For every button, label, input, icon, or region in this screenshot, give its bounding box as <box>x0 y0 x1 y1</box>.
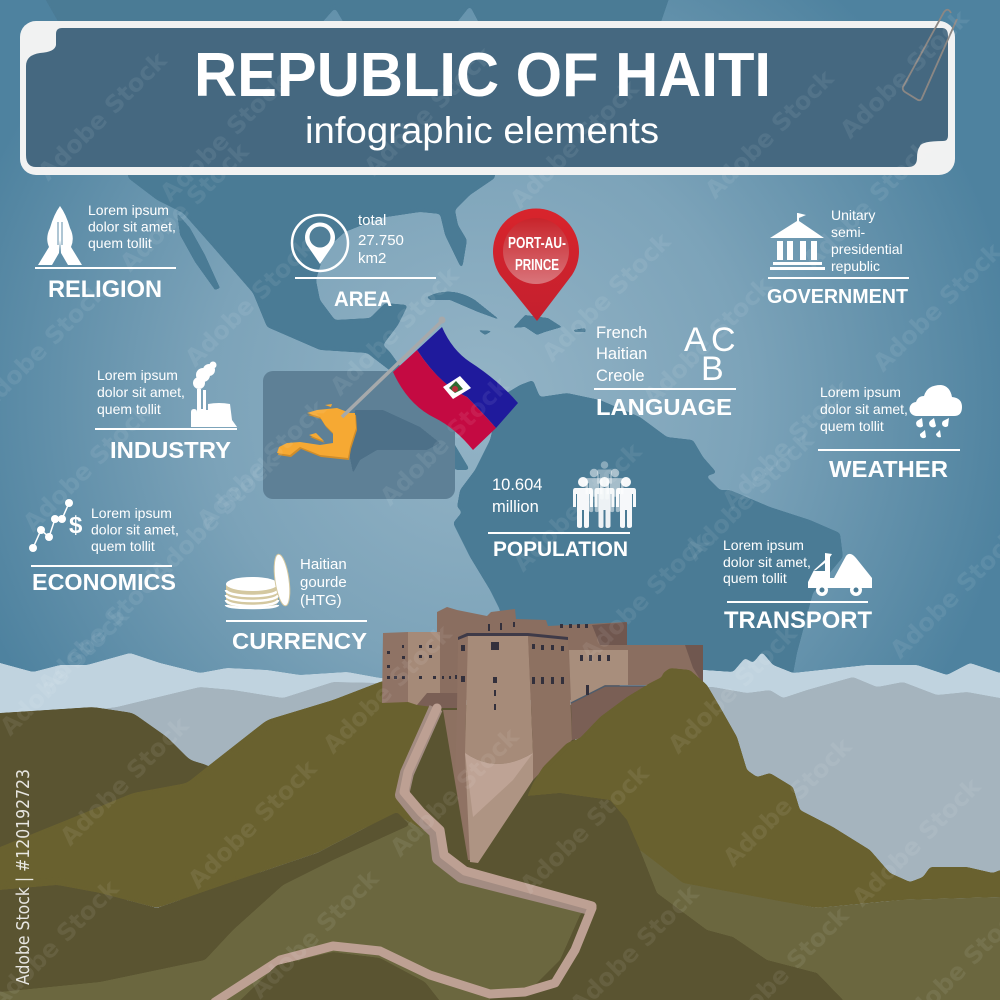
transport text: Lorem ipsum <box>723 537 804 553</box>
watermarks: Adobe Stock <box>145 447 285 587</box>
hill: dome under lower road <box>230 952 447 1000</box>
hill: right olive <box>527 668 1000 908</box>
industry text: Lorem ipsum <box>97 367 178 383</box>
section: weather: quem tollit <box>820 418 884 434</box>
icon: group of people <box>573 461 636 528</box>
icon: abc letters <box>684 321 736 388</box>
section: language: Creole <box>596 367 645 385</box>
section: religion: quem tollit <box>88 235 152 251</box>
banner frame <box>20 21 955 175</box>
watermarks: Adobe Stock <box>55 711 195 851</box>
watermarks: Adobe Stock <box>638 271 778 411</box>
fortress west wing side <box>382 632 408 703</box>
section: government: presidential <box>831 241 903 257</box>
watermarks: Adobe Stock <box>318 619 458 759</box>
watermarks: Adobe Stock <box>575 527 715 667</box>
section: religion <box>35 202 176 303</box>
currency heading: CURRENCY <box>232 628 367 654</box>
subtitle: infographic elements <box>305 110 659 151</box>
section: area <box>292 212 436 311</box>
weather heading: WEATHER <box>829 456 948 482</box>
language heading: LANGUAGE <box>596 394 732 420</box>
map: central america and mexico <box>128 170 495 470</box>
section: government: republic <box>831 258 880 274</box>
section: economics: quem tollit <box>91 538 155 554</box>
section: industry <box>95 362 237 463</box>
section: economics <box>29 499 179 595</box>
section: population: million <box>492 498 539 516</box>
fortress dark back wall <box>592 622 627 645</box>
icon: location pin in circle <box>292 215 348 271</box>
watermarks: Adobe Stock <box>798 134 938 274</box>
icon: factory with smoke <box>191 362 237 427</box>
hill: dark band <box>0 812 410 994</box>
watermarks: Adobe Stock <box>375 371 515 511</box>
section: currency <box>226 553 367 654</box>
fortress middle wing <box>569 650 628 703</box>
industry heading: INDUSTRY <box>110 437 231 463</box>
header banner <box>20 10 957 175</box>
icon: rain cloud <box>909 385 962 438</box>
section: economics: dolor sit amet, <box>91 522 179 538</box>
dominican republic <box>350 410 440 473</box>
icon: praying hands <box>38 206 82 265</box>
watermarks: Adobe Stock <box>155 67 295 207</box>
fortress central shade <box>455 635 470 860</box>
language text: French <box>596 324 647 342</box>
watermarks: Adobe Stock <box>33 46 173 186</box>
icon: paperclip <box>903 10 957 100</box>
hill: central dark <box>470 793 850 1000</box>
map: caribbean islands <box>427 292 586 335</box>
map: baja california <box>177 213 220 290</box>
watermarks: Adobe Stock <box>508 437 648 577</box>
economics text: Lorem ipsum <box>91 505 172 521</box>
watermarks: Adobe Stock <box>192 394 332 534</box>
mountains: pale ridge <box>0 652 1000 1000</box>
economics heading: ECONOMICS <box>32 569 176 595</box>
map: north america, top <box>40 0 672 25</box>
area text: total <box>358 212 386 229</box>
section: transport <box>723 537 872 634</box>
section: weather <box>818 384 962 482</box>
watermarks: Adobe Stock <box>33 559 173 699</box>
section: language <box>594 321 736 420</box>
section: government <box>767 207 909 308</box>
religion heading: RELIGION <box>48 276 162 303</box>
watermarks: Adobe Stock <box>835 4 975 144</box>
section: industry: dolor sit amet, <box>97 384 185 400</box>
panel: haiti locator <box>263 371 455 499</box>
flag of haiti <box>342 316 518 450</box>
icon: coins <box>226 553 293 608</box>
population heading: POPULATION <box>493 538 628 561</box>
watermarks: Adobe Stock <box>515 759 655 899</box>
section: transport: quem tollit <box>723 570 787 586</box>
section: government: semi- <box>831 224 866 240</box>
fortress wedge left <box>443 710 472 860</box>
watermarks: Adobe Stock <box>359 41 499 181</box>
section: currency: gourde <box>300 574 347 591</box>
watermarks: Adobe Stock <box>847 772 987 912</box>
weather text: Lorem ipsum <box>820 384 901 400</box>
flag blue band <box>417 327 518 428</box>
section: area: km2 <box>358 250 386 267</box>
transport heading: TRANSPORT <box>724 607 872 634</box>
hill: between road and fortress <box>405 705 575 872</box>
watermarks: Adobe Stock <box>663 619 803 759</box>
watermarks: Adobe Stock <box>115 137 255 277</box>
fortress east wing shadow <box>685 645 703 684</box>
hill: far left dark <box>0 707 260 900</box>
fortress west wing front <box>408 632 440 705</box>
fortress rail <box>571 686 646 703</box>
pin: port-au-prince <box>493 208 579 321</box>
watermarks: Adobe Stock <box>245 864 385 1000</box>
pin text: PORT-AU- <box>508 235 566 252</box>
icon: growth chart with dollar: $ <box>69 512 83 539</box>
pin: port-au-prince: PRINCE <box>515 257 559 274</box>
section: transport: dolor sit amet, <box>723 554 811 570</box>
hill: left olive <box>0 680 440 908</box>
watermarks: Adobe Stock <box>718 732 858 872</box>
watermarks: Adobe Stock <box>505 74 645 214</box>
fortress tower side <box>528 635 572 780</box>
fortress <box>382 607 703 863</box>
section: industry: quem tollit <box>97 401 161 417</box>
flag pole <box>342 321 442 417</box>
icon: growth chart with dollar <box>29 499 83 552</box>
watermarks: Adobe Stock <box>180 232 320 372</box>
fortress wedge highlight <box>465 753 533 817</box>
fortress roof line <box>458 633 568 640</box>
fortress lower wall <box>417 686 650 740</box>
fortress windows <box>387 622 610 710</box>
currency text: Haitian <box>300 556 347 573</box>
watermarks: Adobe Stock <box>700 64 840 204</box>
population text: 10.604 <box>492 476 542 494</box>
watermarks: Adobe Stock <box>385 722 525 862</box>
map: haiti shadow <box>278 410 357 460</box>
section: religion: dolor sit amet, <box>88 218 176 234</box>
section: weather: dolor sit amet, <box>820 401 908 417</box>
title: REPUBLIC OF HAITI <box>194 41 771 110</box>
pin lens <box>503 218 569 284</box>
watermarks: Adobe Stock <box>325 261 465 401</box>
map: haiti <box>277 404 356 458</box>
icon: government building <box>770 213 825 270</box>
fortress back towers <box>437 607 703 700</box>
icon: abc letters: A <box>684 321 707 359</box>
icon: abc letters: C <box>711 321 736 359</box>
section: currency: (HTG) <box>300 592 342 609</box>
government heading: GOVERNMENT <box>767 285 908 308</box>
road <box>215 708 592 1000</box>
flag red band <box>393 350 496 450</box>
stock id: Adobe Stock | #120192723 <box>13 769 34 985</box>
watermarks: Adobe Stock <box>680 426 820 566</box>
mountains: grey ridge <box>0 677 1000 1000</box>
watermarks: Adobe Stock <box>183 754 323 894</box>
area heading: AREA <box>334 288 392 311</box>
flag emblem <box>443 376 471 399</box>
fortress wedge lower <box>465 753 533 863</box>
watermarks: Adobe Stock <box>717 374 857 514</box>
section: population <box>488 461 636 561</box>
fortress tower front <box>465 635 533 764</box>
icon: abc letters: B <box>701 350 724 388</box>
map: south america <box>453 380 843 690</box>
watermarks: Adobe Stock <box>18 397 158 537</box>
section: area: 27.750 <box>358 232 404 249</box>
icon: dump truck <box>808 553 872 596</box>
government text: Unitary <box>831 207 875 223</box>
hill: foreground light <box>0 815 1000 1000</box>
watermarks: Adobe Stock <box>537 227 677 367</box>
section: language: Haitian <box>596 345 647 363</box>
banner plate <box>26 28 948 167</box>
religion text: Lorem ipsum <box>88 202 169 218</box>
